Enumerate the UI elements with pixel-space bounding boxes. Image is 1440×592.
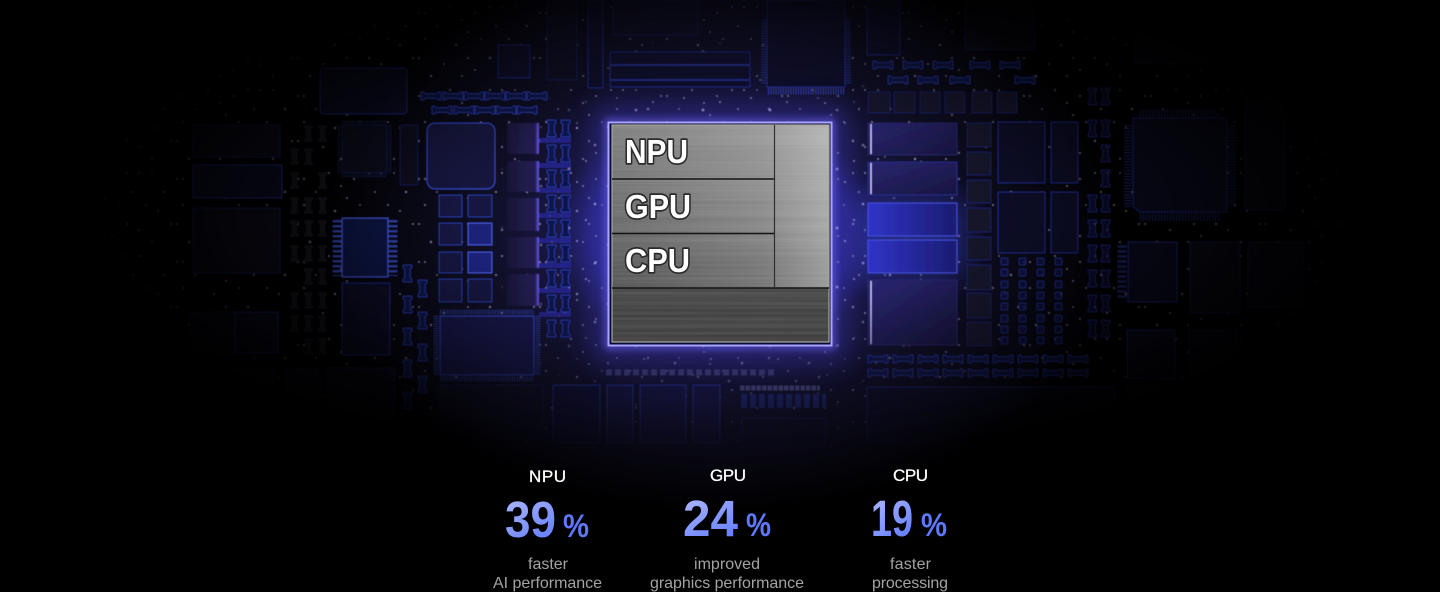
top capacitor rows (421, 61, 1035, 114)
stat: CPU: processing (872, 575, 948, 592)
stat: CPU: CPU (893, 466, 928, 485)
chip label: GPU: GPU (625, 188, 691, 225)
stat: NPU: % (563, 508, 589, 544)
stat: GPU: 24 (683, 490, 739, 547)
chip label: CPU: CPU (625, 242, 690, 279)
small squares grid (439, 195, 492, 302)
small pad grid (1001, 258, 1062, 344)
chip outer glow (604, 118, 836, 350)
top right package row (868, 92, 1017, 113)
stat: GPU: GPU (710, 466, 746, 485)
stat: NPU: 39 (505, 491, 556, 548)
right large bars (860, 123, 965, 345)
right capacitor columns (1088, 88, 1110, 337)
connection strips to the left of chip (539, 138, 571, 317)
stat: CPU: faster (890, 556, 932, 573)
chip die (612, 125, 829, 342)
left capacitor columns (403, 120, 570, 409)
left component group (190, 0, 603, 440)
stat: NPU: NPU (529, 467, 566, 486)
stat: CPU: 19 (871, 490, 913, 547)
stat: NPU (493, 467, 602, 592)
stat: CPU: % (921, 507, 947, 543)
stat: GPU: graphics performance (650, 575, 804, 592)
stat: GPU: % (746, 507, 771, 543)
chip label: NPU: NPU (625, 133, 688, 170)
bottom centre components (553, 372, 826, 448)
right square column (967, 123, 991, 346)
stat: GPU: improved (694, 556, 760, 573)
top chips (610, 0, 1035, 91)
chip frame (608, 122, 832, 346)
left dark package column (507, 123, 539, 306)
chip (608, 122, 832, 346)
stat: NPU: AI performance (493, 575, 602, 592)
stat: NPU: faster (528, 556, 569, 573)
far right chips (1117, 58, 1303, 378)
dark capacitor grid left (290, 125, 327, 355)
solder dot field (100, 0, 1340, 450)
bottom right capacitor rows (867, 355, 1115, 442)
circuit board components (100, 0, 1340, 450)
right rectangles (998, 122, 1078, 253)
stat: CPU (871, 466, 948, 592)
stat: GPU (650, 466, 804, 592)
